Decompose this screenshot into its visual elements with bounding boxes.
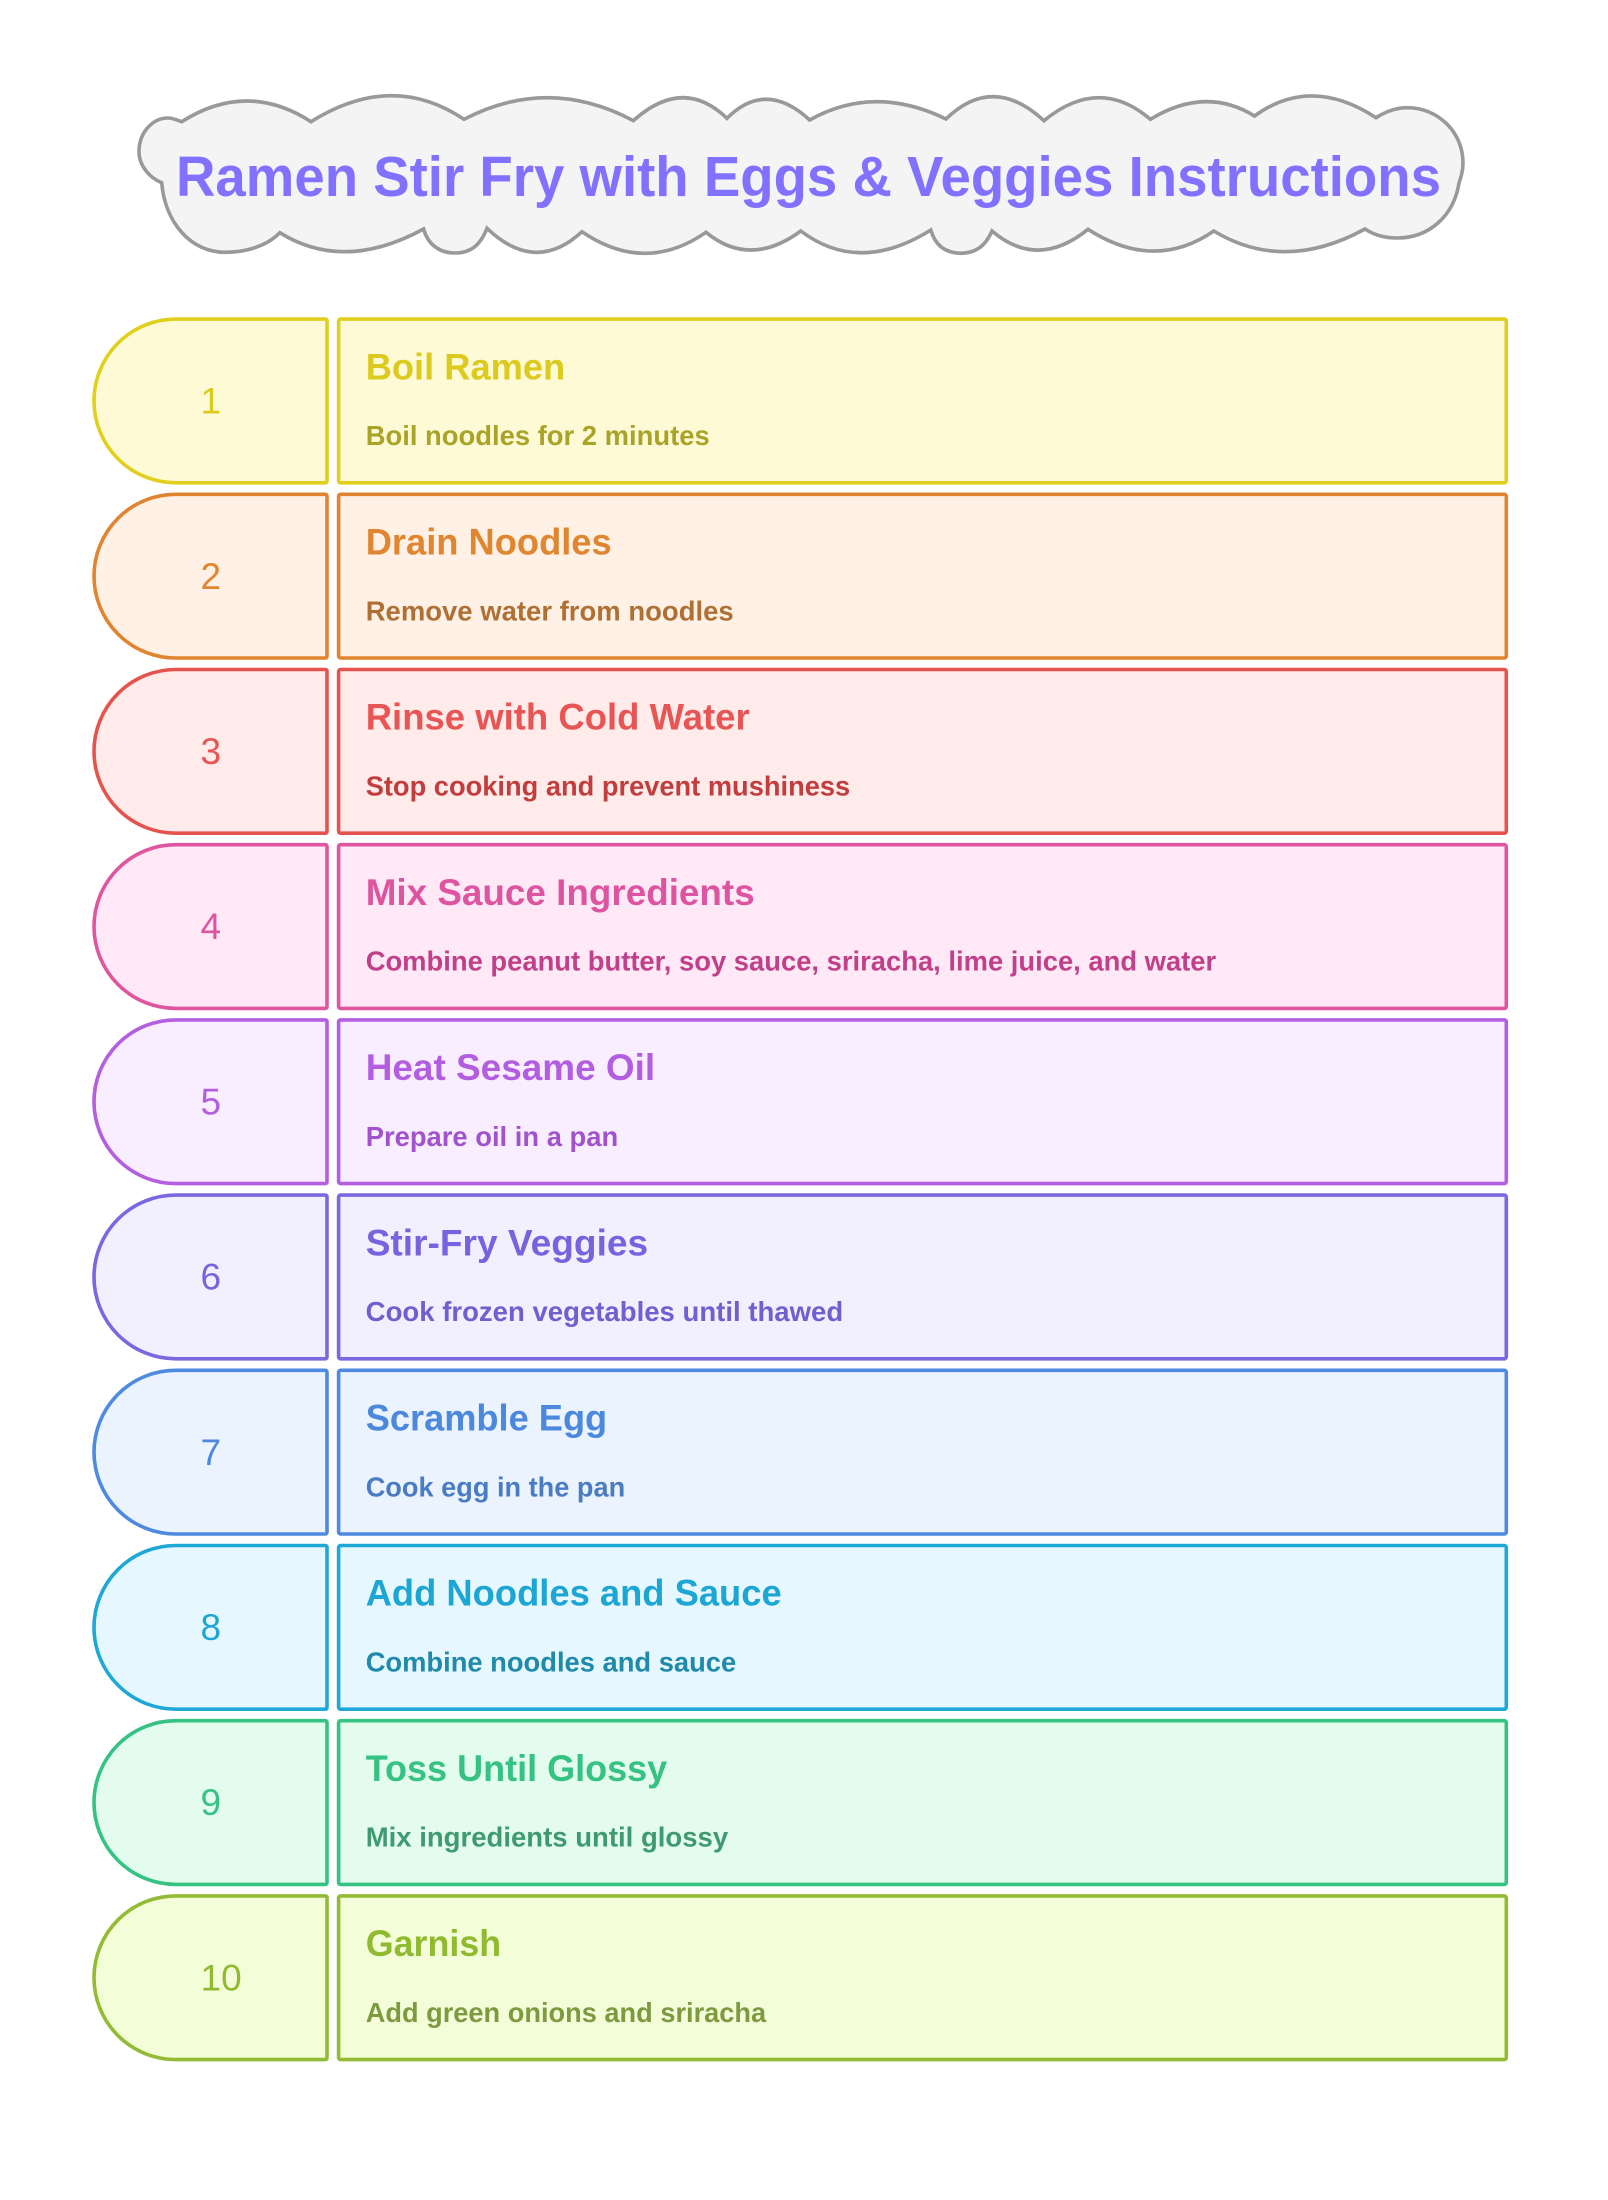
step description: Cook frozen vegetables until thawed [366,1296,843,1327]
step number: 2 [200,556,221,597]
number badge [94,1721,327,1884]
step number: 8 [200,1607,221,1648]
step heading: Add Noodles and Sauce [366,1572,782,1614]
step description: Boil noodles for 2 minutes [366,420,710,451]
step card [339,845,1506,1008]
step number: 5 [200,1081,221,1122]
step heading: Heat Sesame Oil [366,1046,655,1088]
panel: step 10 [94,1896,1506,2060]
step number: 1 [200,381,221,422]
number badge [94,319,327,483]
step card [339,1896,1506,2060]
step description: Mix ingredients until glossy [366,1822,729,1853]
step description: Cook egg in the pan [366,1471,625,1502]
step card [339,1721,1506,1884]
step description: Remove water from noodles [366,595,734,626]
number badge [94,845,327,1008]
panel: step 7 [94,1370,1506,1534]
step number: 3 [200,731,221,772]
title text: Ramen Stir Fry with Eggs & Veggies Instructions [176,145,1441,209]
step heading: Scramble Egg [366,1397,607,1439]
number badge [94,1370,327,1534]
step card [339,1370,1506,1534]
step card [339,494,1506,658]
number badge [94,1020,327,1184]
step card [339,1020,1506,1184]
step card [339,670,1506,833]
step description: Add green onions and sriracha [366,1997,767,2028]
step heading: Drain Noodles [366,520,612,562]
step heading: Mix Sauce Ingredients [366,871,755,913]
step number: 9 [200,1782,221,1823]
step heading: Boil Ramen [366,345,565,387]
number badge [94,494,327,658]
step number: 6 [200,1257,221,1298]
step number: 7 [200,1432,221,1473]
step card [339,1546,1506,1709]
step card [339,319,1506,483]
panel: step 1 [94,319,1506,483]
step description: Stop cooking and prevent mushiness [366,770,850,802]
step description: Prepare oil in a pan [366,1121,618,1152]
title banner [139,96,1463,253]
step heading: Toss Until Glossy [366,1747,667,1789]
number badge [94,1896,327,2060]
panel: step 8 [94,1545,1506,1709]
step description: Combine noodles and sauce [366,1646,736,1678]
panel: step 6 [94,1195,1506,1359]
number badge [94,669,327,833]
step heading: Rinse with Cold Water [366,696,750,738]
panel: step 9 [94,1721,1506,1884]
panel: step 2 [94,494,1506,658]
step card [339,1195,1506,1359]
step number: 10 [200,1957,242,1998]
step number: 4 [200,906,221,947]
panel: step 5 [94,1020,1506,1184]
cloud shape [139,96,1463,253]
step description: Combine peanut butter, soy sauce, sriracha, lime juice, and water [366,946,1216,977]
number badge [94,1545,327,1709]
step heading: Garnish [366,1922,501,1964]
number badge [94,1195,327,1359]
panel: step 4 [94,845,1506,1008]
step heading: Stir-Fry Veggies [366,1221,648,1263]
panel: step 3 [94,669,1506,833]
